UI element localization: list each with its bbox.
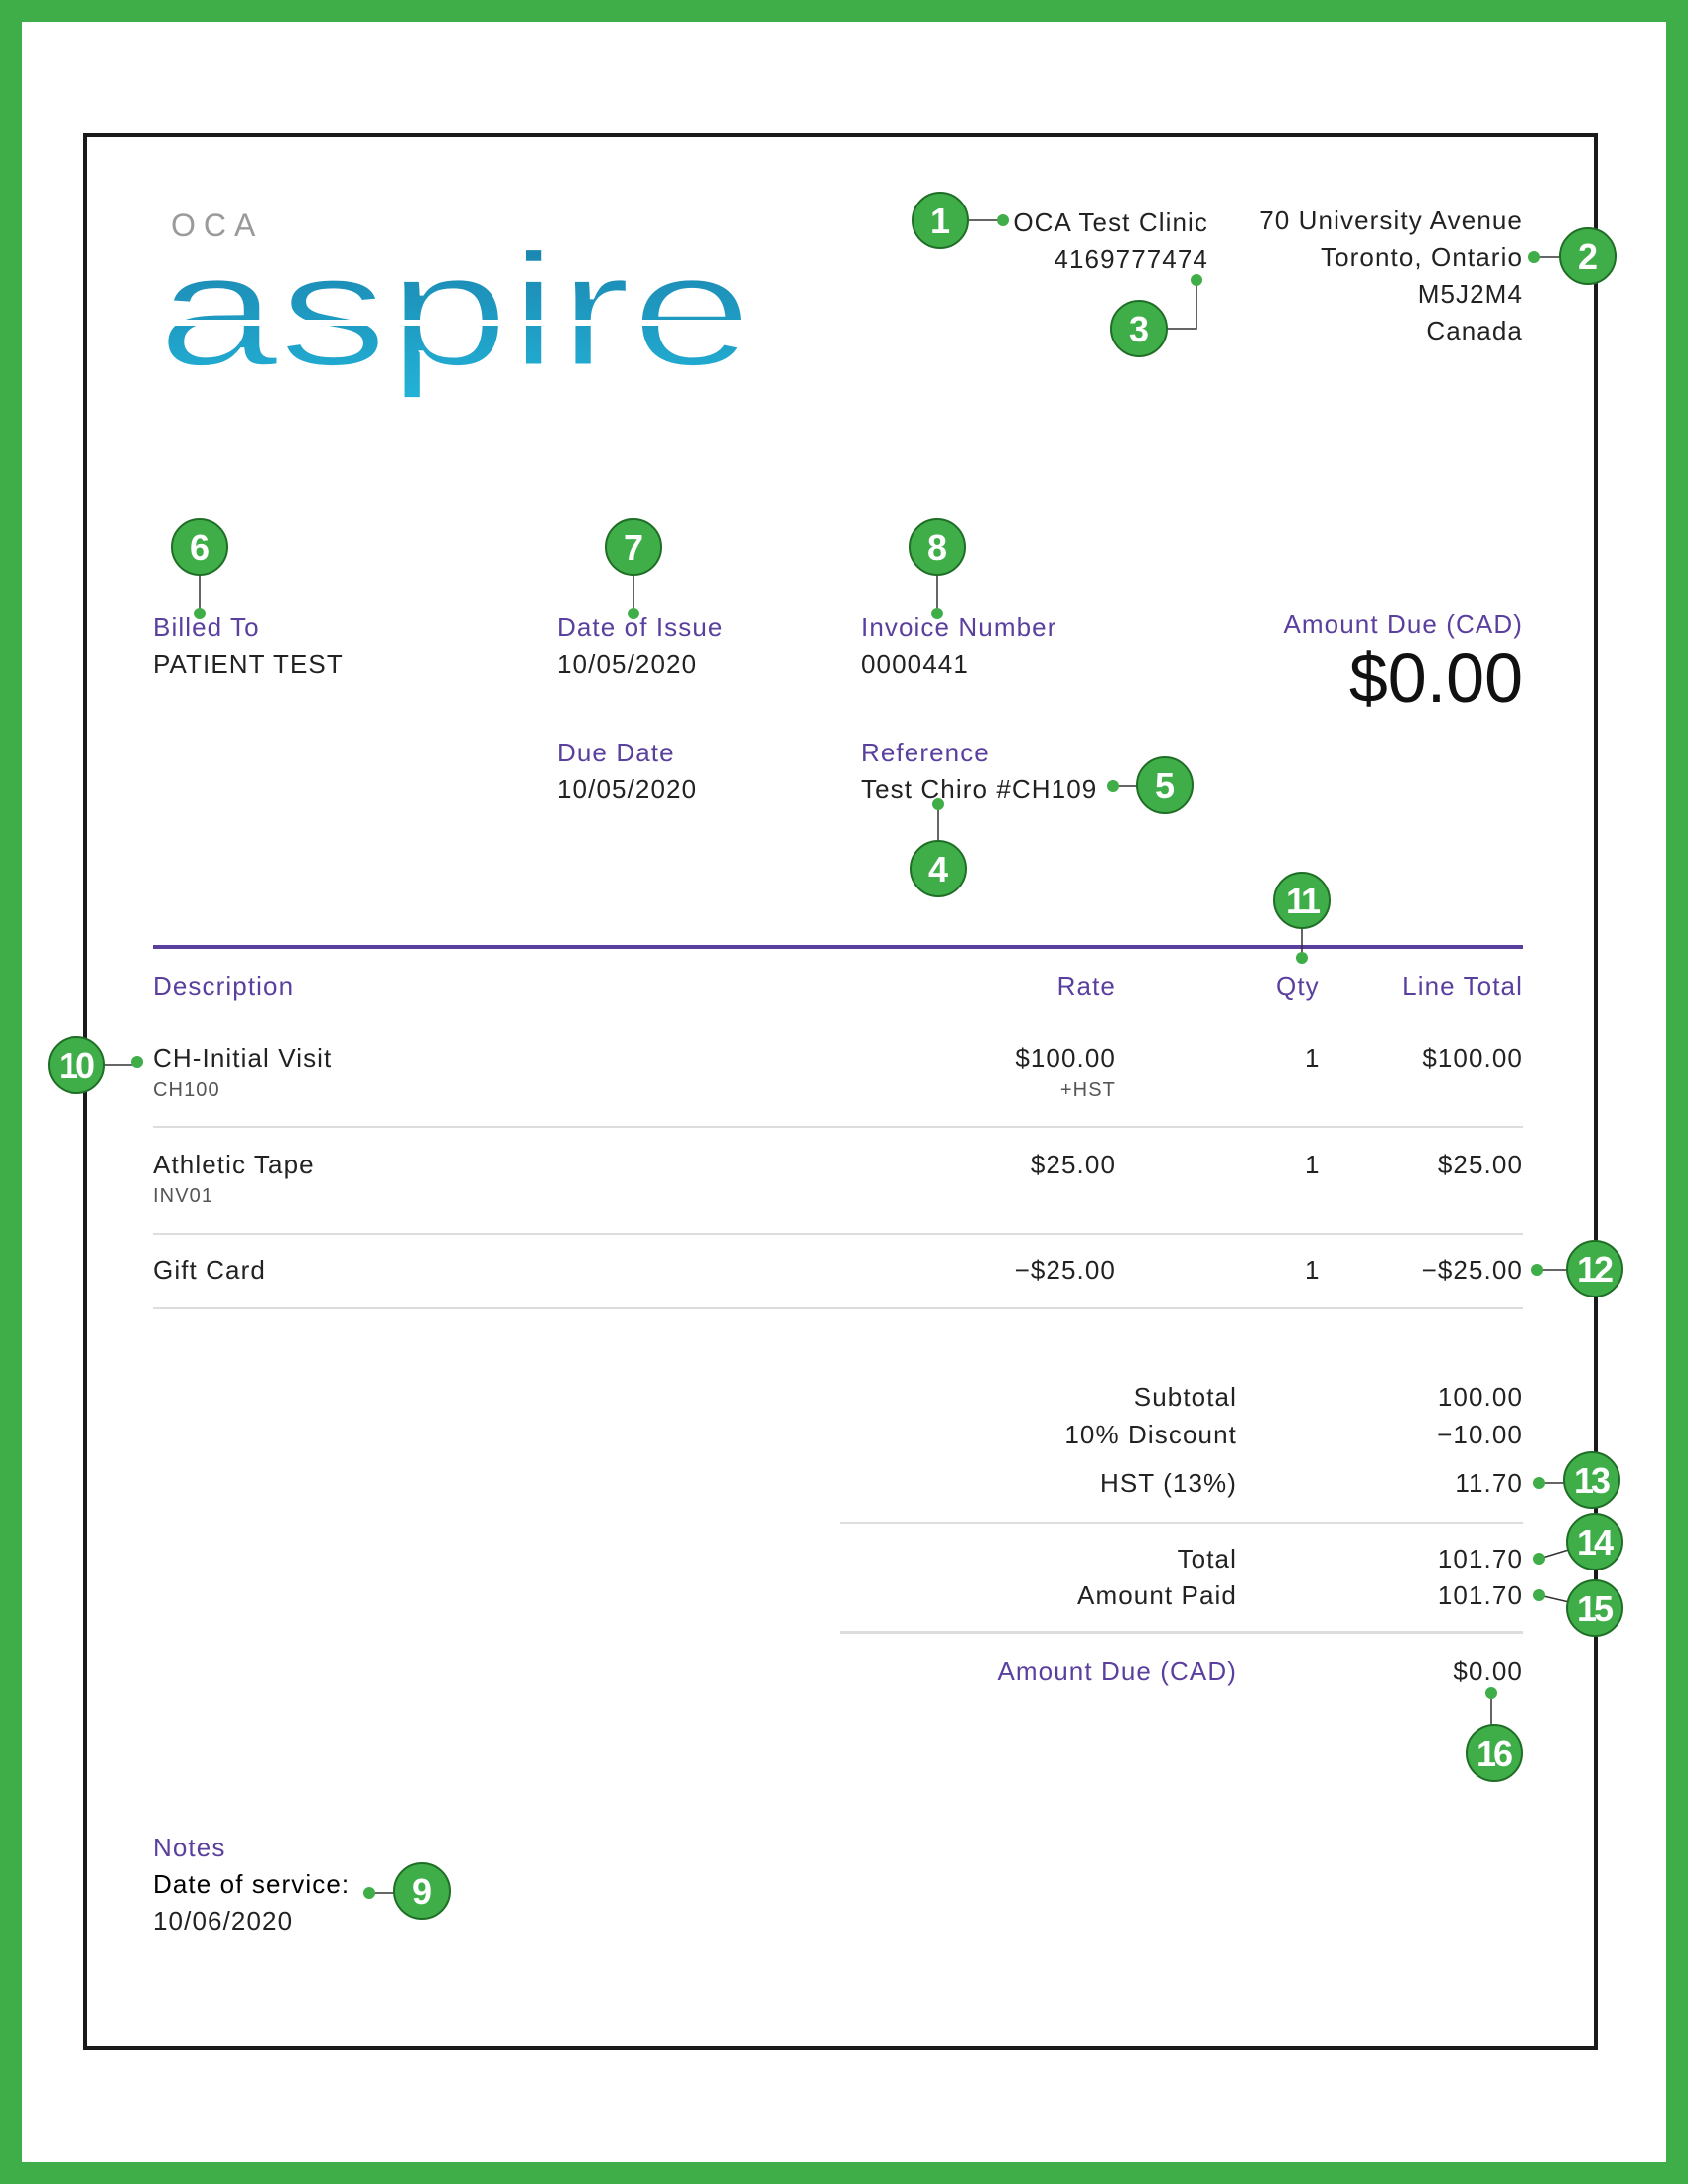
clinic info: [1013, 207, 1208, 274]
amount due header: Amount Due (CAD): [1283, 610, 1523, 639]
badge 6: [172, 519, 227, 619]
totals: Total: [1178, 1544, 1237, 1573]
badge 9: [363, 1863, 450, 1919]
badge 5: 5: [1155, 765, 1175, 806]
badge 10: 10: [59, 1045, 94, 1086]
totals: 11.70: [1455, 1468, 1523, 1498]
address: Toronto, Ontario: [1321, 242, 1523, 272]
badge 7: 7: [624, 527, 643, 568]
badge 11: [1274, 873, 1330, 964]
badge 15: 15: [1577, 1588, 1614, 1629]
table: −$25.00: [1422, 1255, 1523, 1285]
totals: 10% Discount: [1064, 1420, 1237, 1449]
billed to: Billed To: [153, 613, 260, 642]
badge 11: 11: [1286, 881, 1321, 921]
invoice number: [861, 613, 1056, 679]
amount due header: [1283, 610, 1523, 717]
totals: HST (13%): [1100, 1468, 1237, 1498]
badge 10: [49, 1037, 143, 1093]
table: Rate: [1057, 971, 1116, 1001]
badge 13: 13: [1574, 1460, 1610, 1501]
address: Canada: [1426, 316, 1523, 345]
invoice number: Invoice Number: [861, 613, 1056, 642]
badge 3: [1111, 274, 1202, 356]
table: $25.00: [1031, 1150, 1116, 1179]
reference: [861, 738, 1097, 804]
amount due header: $0.00: [1349, 639, 1523, 717]
invoice number: 0000441: [861, 649, 969, 679]
row 2: Athletic Tape: [153, 1150, 315, 1179]
totals: Amount Due (CAD): [997, 1656, 1237, 1686]
address: M5J2M4: [1418, 279, 1523, 309]
badge 4: [911, 798, 966, 896]
table: Line Total: [1402, 971, 1523, 1001]
badge 4: 4: [928, 849, 948, 889]
logo: aspire: [157, 220, 753, 400]
table: $100.00: [1422, 1043, 1523, 1073]
table: INV01: [153, 1185, 213, 1207]
badge 3: 3: [1129, 309, 1149, 349]
badge 8: 8: [927, 527, 947, 568]
table: +HST: [1060, 1079, 1116, 1101]
badge 5: [1107, 757, 1193, 813]
due date: [557, 738, 697, 804]
badge 7: [606, 519, 661, 619]
logo: OCA: [171, 207, 263, 243]
billed to: PATIENT TEST: [153, 649, 344, 679]
table: Qty: [1276, 971, 1320, 1001]
totals: −10.00: [1437, 1420, 1523, 1449]
table: CH100: [153, 1079, 220, 1101]
table: 1: [1305, 1150, 1321, 1179]
totals: Amount Paid: [1077, 1580, 1237, 1610]
row 1: CH-Initial Visit: [153, 1043, 332, 1073]
reference: Reference: [861, 738, 990, 767]
purple rule: [153, 945, 1523, 949]
address: [1259, 205, 1523, 345]
due date: Due Date: [557, 738, 675, 767]
address: 70 University Avenue: [1259, 205, 1523, 235]
table: [153, 971, 1523, 1309]
date of issue: Date of Issue: [557, 613, 723, 642]
totals: $0.00: [1453, 1656, 1523, 1686]
totals: Subtotal: [1134, 1382, 1237, 1412]
badge 1: 1: [930, 201, 950, 241]
notes: [153, 1833, 350, 1936]
table: $100.00: [1015, 1043, 1116, 1073]
logo: [157, 207, 753, 400]
badge 15: [1533, 1580, 1622, 1636]
table: $25.00: [1438, 1150, 1523, 1179]
billed to: [153, 613, 344, 679]
date of issue: [557, 613, 723, 679]
badge 14: 14: [1577, 1522, 1614, 1563]
badge 6: 6: [190, 527, 210, 568]
totals: [840, 1382, 1523, 1686]
table: −$25.00: [1015, 1255, 1116, 1285]
clinic info: OCA Test Clinic: [1013, 207, 1208, 237]
badge 2: [1528, 228, 1616, 284]
notes: 10/06/2020: [153, 1906, 293, 1936]
invoice box: [83, 133, 1598, 2050]
badge 1: [913, 193, 1009, 248]
totals: 100.00: [1438, 1382, 1523, 1412]
header row: Description: [153, 971, 294, 1001]
clinic info: 4169777474: [1054, 244, 1208, 274]
due date: 10/05/2020: [557, 774, 697, 804]
badge 12: [1531, 1241, 1622, 1297]
row 3: Gift Card: [153, 1255, 266, 1285]
notes: Notes: [153, 1833, 225, 1862]
reference: Test Chiro #CH109: [861, 774, 1097, 804]
notes: Date of service:: [153, 1869, 350, 1899]
badge 12: 12: [1577, 1249, 1613, 1290]
totals: 101.70: [1438, 1580, 1523, 1610]
totals: 101.70: [1438, 1544, 1523, 1573]
table: 1: [1305, 1255, 1321, 1285]
badge 9: 9: [412, 1871, 432, 1912]
date of issue: 10/05/2020: [557, 649, 697, 679]
badge 2: 2: [1578, 236, 1598, 277]
badge 8: [910, 519, 965, 619]
table: 1: [1305, 1043, 1321, 1073]
badge 13: [1533, 1452, 1619, 1508]
badge 14: [1533, 1514, 1622, 1570]
badge 16: [1467, 1687, 1522, 1781]
badge 16: 16: [1477, 1733, 1512, 1774]
